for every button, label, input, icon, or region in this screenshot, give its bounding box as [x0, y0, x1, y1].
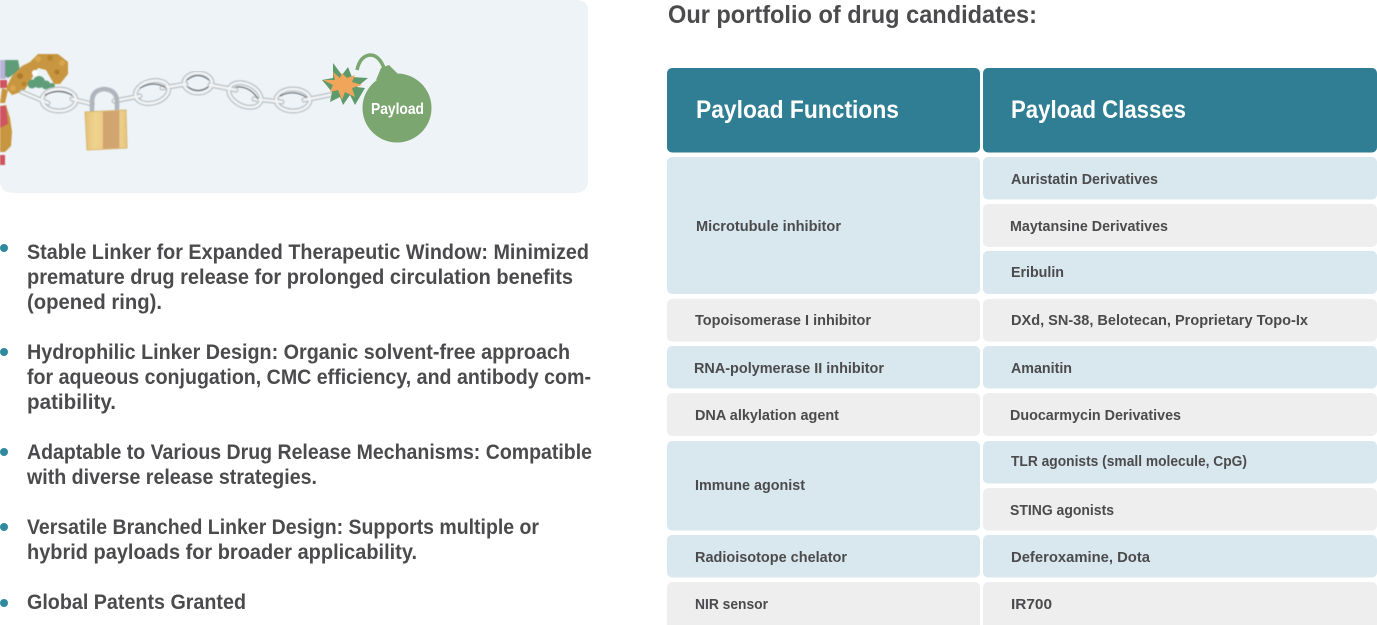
row: duocarmycin: Duocarmycin Derivatives [1010, 408, 1181, 424]
row: dna alkylation: DNA alkylation agent [695, 408, 839, 424]
bullet: patents: Global Patents Granted [27, 591, 246, 614]
header: payload classes [983, 68, 1377, 152]
heading: Our portfolio of drug candidates: [668, 1, 1037, 29]
bullet: stable linker: (opened ring). [27, 291, 162, 314]
row: deferoxamine [983, 535, 1377, 578]
row: sting agonists [983, 488, 1377, 530]
bullet: hydrophilic linker: patibility. [27, 391, 116, 414]
row: auristatin: Auristatin Derivatives [1011, 172, 1158, 188]
row: dna alkylation [667, 393, 980, 436]
row: tlr agonists: TLR agonists (small molecule, CpG) [1011, 454, 1247, 470]
row: microtubule inhibitor: Microtubule inhibitor [696, 219, 841, 235]
row: deferoxamine: Deferoxamine, Dota [1011, 550, 1151, 566]
bullet list [0, 241, 592, 614]
bullet: hydrophilic linker [0, 341, 591, 414]
row: eribulin [983, 251, 1377, 294]
table [667, 68, 1377, 625]
row: rna polymerase: RNA-polymerase II inhibitor [694, 361, 884, 377]
bullet: hydrophilic linker: for aqueous conjugation, CMC efficiency, and antibody com- [27, 366, 591, 389]
row: amanitin [983, 346, 1377, 388]
row: nir sensor [667, 582, 980, 625]
row: microtubule inhibitor [667, 157, 980, 294]
bullet: release mechanisms [0, 441, 592, 489]
row: amanitin: Amanitin [1011, 361, 1072, 377]
row: topo classes [983, 299, 1377, 342]
row: nir sensor: NIR sensor [695, 597, 768, 613]
bullet: stable linker: Stable Linker for Expanded Therapeutic Window: Minimized [27, 241, 589, 264]
bullet: stable linker: premature drug release for prolonged circulation benefits [27, 266, 573, 289]
row: auristatin [983, 157, 1377, 200]
illustration: antibody [0, 54, 68, 165]
illustration: payload bomb: Payload [371, 101, 424, 118]
row: topoisomerase [667, 299, 980, 342]
bullet: hydrophilic linker: Hydrophilic Linker Design: Organic solvent-free approach [27, 341, 570, 364]
illustration: chain [22, 73, 335, 112]
bullet: branched linker: hybrid payloads for broader applicability. [27, 541, 417, 564]
illustration: padlock [85, 89, 127, 150]
header: payload classes: Payload Classes [1011, 96, 1186, 124]
bullet: stable linker [0, 241, 589, 314]
row: topoisomerase: Topoisomerase I inhibitor [695, 313, 871, 329]
bullet: branched linker [0, 516, 539, 564]
bullet: release mechanisms: Adaptable to Various Drug Release Mechanisms: Compatible [27, 441, 592, 464]
row: radioisotope chelator [667, 535, 980, 578]
row: sting agonists: STING agonists [1010, 503, 1114, 519]
header: payload functions [667, 68, 980, 152]
row: immune agonist [667, 441, 980, 530]
row: radioisotope chelator: Radioisotope chelator [695, 550, 847, 566]
bullet: branched linker: Versatile Branched Linker Design: Supports multiple or [27, 516, 539, 539]
row: ir700 [983, 582, 1377, 625]
row: immune agonist: Immune agonist [695, 478, 805, 494]
illustration panel [0, 0, 588, 193]
header: payload functions: Payload Functions [696, 96, 899, 124]
row: ir700: IR700 [1011, 597, 1052, 613]
bullet: release mechanisms: with diverse release strategies. [26, 466, 317, 489]
row: maytansine [983, 204, 1377, 247]
row: maytansine: Maytansine Derivatives [1010, 219, 1168, 235]
row: eribulin: Eribulin [1011, 265, 1064, 281]
row: topo classes: DXd, SN-38, Belotecan, Proprietary Topo-Ix [1011, 313, 1308, 329]
illustration: payload bomb [322, 55, 432, 142]
row: tlr agonists [983, 441, 1377, 484]
row: duocarmycin [983, 393, 1377, 436]
row: rna polymerase [667, 346, 980, 388]
